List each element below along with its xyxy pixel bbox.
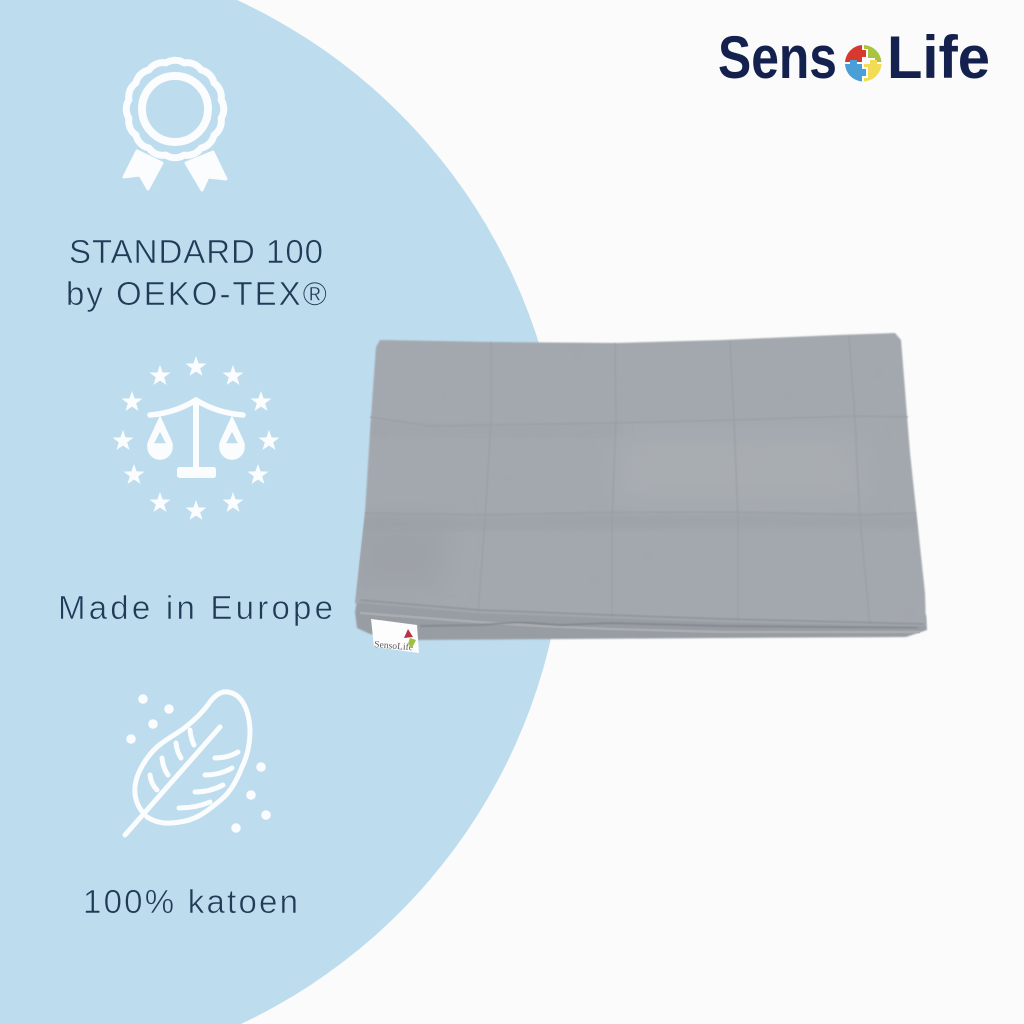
icon: puzzle ball: [845, 45, 882, 82]
sewn label: SensoLife: [374, 639, 414, 653]
logo: SensoLife: [718, 24, 990, 91]
text: made in europe: Made in Europe: [58, 589, 333, 626]
text: standard 100 by oeko-tex: [66, 233, 327, 312]
text: standard 100 by oeko-tex: by OEKO-TEX®: [66, 275, 327, 312]
sewn label: [371, 619, 419, 653]
panel: blue semicircle: [0, 0, 565, 1024]
blanket lower folded layers: [355, 600, 927, 640]
text: 100% katoen: 100% katoen: [83, 883, 298, 920]
text: standard 100 by oeko-tex: STANDARD 100: [69, 233, 323, 270]
blanket hem: [360, 600, 924, 624]
logo: SensoLife: Sens: [718, 24, 837, 91]
logo: SensoLife: Life: [887, 24, 990, 91]
blanket fabric shading: [356, 424, 918, 594]
icon: european stars and scales: [112, 356, 280, 520]
icon: feather with dots: [125, 692, 271, 835]
blanket top surface: [355, 333, 926, 626]
icon: certificate rosette: [118, 52, 232, 190]
product photo: folded grey weighted blanket: [350, 330, 930, 653]
blanket seams: [365, 336, 916, 624]
